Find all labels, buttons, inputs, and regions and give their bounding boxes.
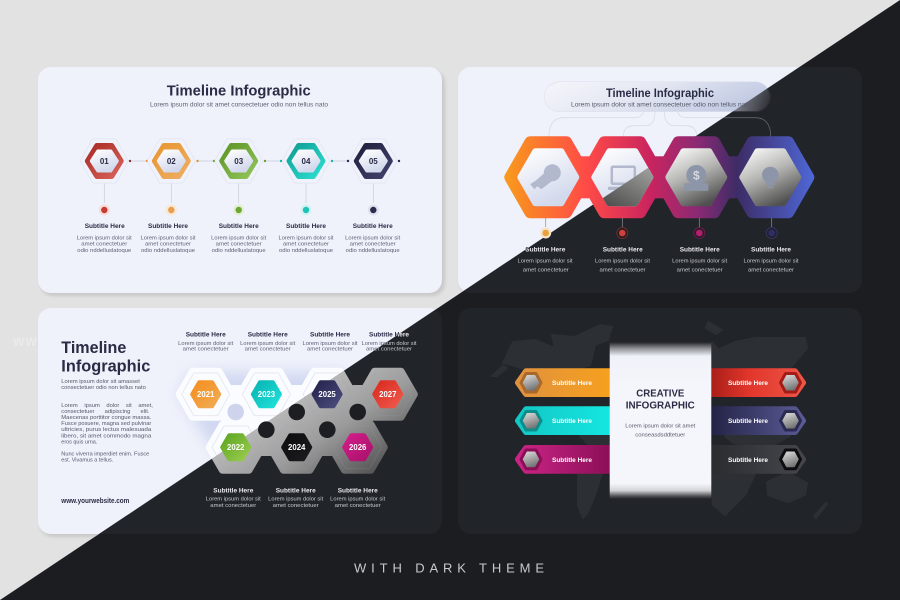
year 2023: 2023 (258, 390, 276, 399)
body paragraph: ultricies, purus lectus malesuada (61, 427, 152, 433)
body paragraph: Nunc viverra imperdiet enim. Fusce (61, 452, 149, 458)
top labels: Subtitle Here (248, 331, 288, 338)
fourth label on dark: Lorem ipsum dolor sit (362, 341, 417, 347)
connector dots (129, 160, 400, 162)
panel: hexagon chain (top right) (458, 67, 865, 296)
honeycomb shadow (178, 368, 312, 445)
tile rings (182, 373, 412, 469)
step markers (99, 204, 379, 216)
step descriptions: odio nddelluslatoque (346, 248, 400, 254)
card text: Lorem ipsum dolor sit amet (625, 423, 696, 429)
year 2021: 2021 (197, 390, 215, 399)
card text: conseasdsddtetuer (635, 433, 685, 439)
top labels (186, 332, 399, 336)
step descriptions (77, 235, 401, 254)
year 2027: 2027 (379, 390, 396, 399)
top labels: Subtitle Here (369, 331, 409, 338)
heading: Timeline (61, 338, 126, 357)
year 2024: 2024 (288, 443, 306, 452)
right bar: navy (709, 409, 803, 432)
year 2023 (253, 382, 280, 406)
step descriptions: Lorem ipsum dolor sit (140, 235, 196, 241)
step descriptions: Lorem ipsum dolor sit (211, 235, 267, 241)
intro text: consectetuer odio non tellus nato (61, 385, 146, 391)
left bar: orange: Subtitle Here (552, 380, 592, 387)
top labels: Subtitle Here (310, 331, 350, 338)
bottom descriptions: amet conectetuer (210, 503, 256, 509)
step descriptions: Lorem ipsum dolor sit (278, 235, 334, 241)
step descriptions (518, 258, 799, 274)
first label, dark-on-light part: Subtitle Here (525, 247, 566, 254)
top descriptions: amet conectetuer (307, 347, 353, 353)
step labels: Subtitle Here (219, 223, 259, 230)
bottom labels (213, 487, 378, 494)
connectors from pill: dark part (696, 117, 771, 136)
step descriptions: amet conectetuer (677, 268, 723, 274)
year 2026: 2026 (349, 443, 367, 452)
step descriptions: amet conectetuer (600, 268, 646, 274)
step descriptions: odio nddelluslatoque (141, 248, 195, 254)
step 03 hexagon (218, 142, 260, 180)
step 04 hexagon: 04 (302, 157, 311, 166)
fourth label on dark: amet conectetuer (366, 347, 412, 353)
step labels: Subtitle Here (603, 247, 643, 254)
top descriptions (178, 341, 386, 350)
step 01 hexagon: 01 (100, 157, 109, 166)
hexagon 4 with bulb icon (742, 151, 798, 203)
body paragraph: eros quis urna. (61, 439, 98, 445)
top descriptions: amet conectetuer (183, 347, 229, 353)
step descriptions: Lorem ipsum dolor sit (77, 235, 132, 241)
step descriptions: Lorem ipsum dolor sit (595, 258, 650, 264)
subheading: Lorem ipsum dolor sit amet consectetuer odio non tellus nato (150, 102, 329, 108)
card heading (626, 388, 695, 412)
body paragraph: libero, sit amet commodo magna (61, 433, 152, 439)
year 2022: 2022 (227, 443, 245, 452)
body paragraph: est. Vivamus a tellus. (61, 458, 114, 464)
step descriptions: amet conectetuer (523, 268, 569, 274)
step descriptions: odio nddelluslatoque (77, 248, 131, 254)
step descriptions: amet conectetuer (145, 242, 191, 248)
panel: honeycomb timeline (bottom left) (38, 308, 445, 537)
center card (610, 342, 711, 499)
right bar: red: Subtitle Here (728, 380, 768, 387)
step descriptions: amet conectetuer (283, 242, 329, 248)
step labels: Subtitle Here (751, 247, 791, 254)
top labels: Subtitle Here (186, 331, 226, 338)
left bar: teal: Subtitle Here (552, 418, 592, 425)
heading: Infographic (61, 356, 150, 376)
step descriptions: amet conectetuer (216, 242, 262, 248)
body paragraph: consectetuer adipiscing elit. (61, 409, 150, 415)
hexagon 3 with coin icon: $ (693, 168, 700, 182)
bottom labels: Subtitle Here (213, 487, 254, 494)
fourth label on dark (375, 333, 416, 350)
right bar: grey (709, 448, 803, 471)
year 2024 (283, 435, 310, 459)
connector line (104, 161, 373, 203)
panel: world map bars (bottom right) (458, 308, 862, 534)
year 2025: 2025 (318, 390, 336, 399)
step descriptions: odio nddelluslatoque (279, 248, 333, 254)
card heading: CREATIVE (636, 388, 684, 400)
bottom descriptions: amet conectetuer (335, 503, 381, 509)
honeycomb dark tiles (180, 372, 414, 470)
bottom descriptions: Lorem ipsum dolor sit (206, 497, 261, 503)
honeycomb light tiles (176, 368, 344, 459)
step 02 hexagon: 02 (167, 157, 176, 166)
year 2021 (192, 382, 219, 406)
body paragraph: Fusce posuere, magna sed pulvinar (61, 421, 151, 427)
step labels (85, 223, 393, 230)
heading: Timeline Infographic (167, 82, 311, 100)
title pill (544, 82, 770, 112)
left bar: teal (518, 409, 612, 432)
heading (61, 338, 150, 376)
step labels (526, 247, 791, 252)
intro text: Lorem ipsum dolor sit amasset (61, 379, 140, 385)
step 05 hexagon (352, 142, 394, 180)
bottom descriptions: Lorem ipsum dolor sit (330, 497, 386, 503)
top descriptions: amet conectetuer (366, 347, 412, 353)
footer caption: WITH DARK THEME (354, 560, 544, 576)
stems and markers (540, 218, 777, 238)
step descriptions: Lorem ipsum dolor sit (672, 258, 728, 264)
year 2027 (374, 382, 401, 406)
step 04 hexagon (285, 142, 327, 180)
right bar: navy: Subtitle Here (728, 418, 768, 425)
bottom descriptions (206, 497, 386, 509)
step 05 hexagon: 05 (369, 157, 378, 166)
bottom labels: Subtitle Here (338, 487, 378, 494)
step labels: Subtitle Here (525, 247, 566, 254)
watermark: WWW (13, 335, 50, 349)
top descriptions: Lorem ipsum dolor sit (362, 341, 417, 347)
hexagon 1 with key icon (520, 151, 576, 203)
step labels: Subtitle Here (353, 223, 393, 230)
body paragraph (61, 403, 153, 464)
honeycomb holes (227, 404, 366, 438)
website: www.yourwebsite.com (60, 498, 129, 505)
intro text (61, 379, 146, 391)
bottom descriptions: Lorem ipsum dolor sit (268, 497, 324, 503)
step descriptions: Lorem ipsum dolor sit (744, 258, 799, 264)
left bar: magenta (518, 448, 612, 471)
card text (625, 423, 696, 439)
fourth label on dark: Subtitle Here (369, 331, 409, 338)
step 03 hexagon: 03 (234, 157, 244, 166)
hexagon 2 dark half (602, 168, 654, 206)
world map (492, 322, 827, 518)
bottom labels: Subtitle Here (276, 487, 316, 494)
step descriptions: amet conectetuer (81, 242, 127, 248)
step 02 hexagon (150, 142, 192, 180)
right bar: red (709, 371, 803, 394)
step descriptions: odio nddelluslatoque (212, 248, 266, 254)
left bar: orange (518, 371, 612, 394)
body paragraph: Maecenas porttitor congue massa. (61, 415, 152, 421)
step descriptions: Lorem ipsum dolor sit (345, 235, 401, 241)
year 2025 (314, 382, 341, 406)
connectors from pill: light part (548, 112, 724, 136)
chain band (510, 142, 808, 212)
step labels: Subtitle Here (85, 223, 125, 230)
card heading: INFOGRAPHIC (626, 400, 695, 412)
step descriptions: amet conectetuer (350, 242, 396, 248)
subheading: Lorem ipsum dolor sit amet consectetuer odio non tellus nato (571, 102, 752, 108)
step labels: Subtitle Here (148, 223, 188, 230)
right bar: grey: Subtitle Here (728, 457, 768, 464)
top descriptions: Lorem ipsum dolor sit (302, 341, 358, 347)
hexagon 3 with coin icon (668, 151, 724, 203)
step descriptions: Lorem ipsum dolor sit (518, 258, 573, 264)
top descriptions: Lorem ipsum dolor sit (240, 341, 296, 347)
top descriptions: amet conectetuer (245, 347, 291, 353)
year 2026 (344, 435, 371, 459)
step descriptions: amet conectetuer (748, 268, 794, 274)
step labels: Subtitle Here (286, 223, 326, 230)
step 01 hexagon (83, 142, 125, 180)
bottom descriptions: amet conectetuer (273, 503, 319, 509)
year 2022 (222, 435, 249, 459)
step labels: Subtitle Here (680, 247, 720, 254)
body paragraph: Lorem ipsum dolor sit amet, (61, 403, 153, 409)
top descriptions: Lorem ipsum dolor sit (178, 341, 234, 347)
hexagon 2 with laptop icon (594, 151, 650, 203)
heading: Timeline Infographic (606, 88, 715, 100)
left bar: magenta: Subtitle Here (552, 457, 592, 464)
panel: five-step timeline (top left) (38, 67, 445, 296)
